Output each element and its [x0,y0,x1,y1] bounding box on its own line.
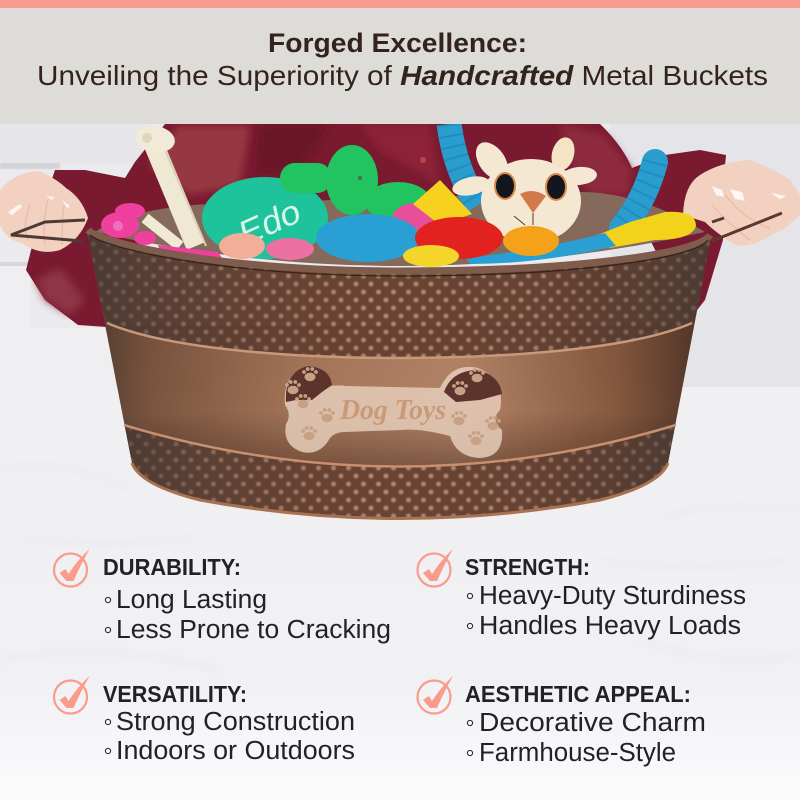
feature: aesthetic appeal [418,676,706,767]
bucket hammered bands [86,227,712,517]
heading: versatility: VERSATILITY: [103,681,247,707]
back wall and cabinets [0,124,800,387]
toy: white bone [133,123,206,246]
bullet list: versatility: Strong Construction [116,708,355,736]
toy: red ball [415,217,503,259]
heading: durability: DURABILITY: [103,554,241,580]
bone label on bucket [285,366,502,458]
person: red shirt and sleeves [26,124,726,327]
toy: green ball [202,177,328,259]
brand text: Dog Toys [339,394,446,426]
dark paw patch right [444,370,502,402]
toy: blue rope back [449,124,478,205]
subtitle: Unveiling the Superiority of Handcrafted Metal Buckets [37,60,768,91]
icon: check [54,549,90,586]
toy: pink tufts [219,203,439,260]
left handle [11,220,85,241]
bullet list: strength [467,582,746,640]
feature: durability [54,549,391,644]
toy: pink knot [101,203,222,258]
toy: blue rope pile [316,214,616,264]
feature: strength [418,549,746,640]
bucket body [86,227,712,518]
bullet list: aesthetic appeal: Farmhouse-Style [479,739,676,767]
marble counter background [0,387,800,800]
icon: check [54,676,90,714]
title: Forged Excellence: [268,28,527,58]
feature: versatility [54,676,355,765]
toy: yellow ball [403,245,459,267]
bullet list: versatility: Indoors or Outdoors [116,737,355,765]
toy: orange ball [503,226,559,256]
bucket interior [95,192,705,266]
bullet list: aesthetic appeal: Decorative Charm [479,709,706,737]
bucket [86,227,713,520]
top accent bar [0,0,800,8]
heading: strength: STRENGTH: [465,554,590,580]
toy: blue rope right [622,162,655,228]
bullet list: strength: Handles Heavy Loads [479,612,741,640]
bullet list: durability [105,586,391,644]
bullet list: versatility [105,708,355,765]
bullet list: durability: Less Prone to Cracking [116,616,391,644]
bullet list: strength: Heavy-Duty Sturdiness [479,582,746,610]
toy: green ball: Edo [233,193,307,253]
heading: aesthetic appeal: AESTHETIC APPEAL: [465,681,691,707]
paw prints [285,367,501,445]
left hand [0,171,88,252]
icon: check [418,676,453,714]
icon: check [418,549,453,586]
header band [0,8,800,124]
toy: green plush [280,145,431,222]
toy: yellow bone [585,212,696,248]
right handle [712,213,782,241]
dark paw patch left [286,366,332,402]
toy: yellow plush [413,180,472,225]
toy: white plush bunny [451,135,598,243]
bullet list: aesthetic appeal [467,709,706,767]
right hand [683,160,800,246]
bullet list: durability: Long Lasting [116,586,267,614]
